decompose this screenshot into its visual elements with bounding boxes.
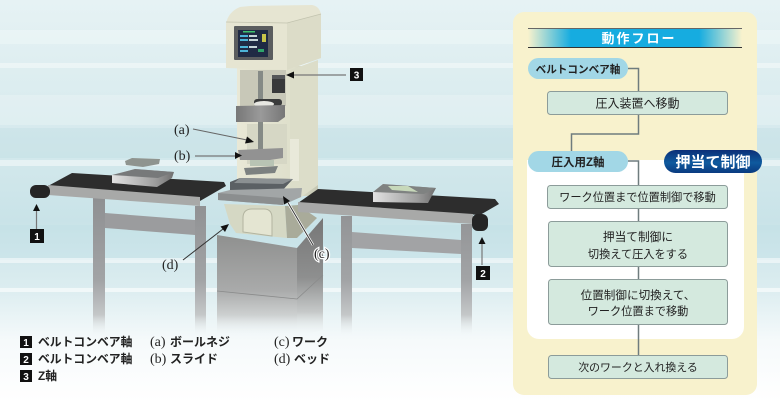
step: position control: ワーク位置まで位置制御で移動	[559, 190, 716, 204]
right frame	[298, 202, 473, 224]
step: replace work: 次のワークと入れ換える	[578, 361, 698, 374]
work upper	[244, 160, 278, 175]
badge: press control	[664, 150, 762, 173]
legend item 3: 3	[23, 372, 29, 383]
callout a	[174, 123, 254, 144]
mold	[230, 178, 293, 193]
step: return: 位置制御に切換えて、	[581, 288, 695, 302]
callout d: (d)	[162, 258, 179, 273]
legend item 1: ベルトコンベア軸	[38, 335, 133, 349]
left workpiece	[112, 158, 174, 187]
legend item a: (a)	[150, 335, 166, 350]
upper block	[236, 105, 285, 122]
callout 3	[286, 68, 363, 82]
step: press control: 押当て制御に	[603, 230, 673, 244]
left belt	[48, 173, 226, 201]
pill: press Z axis: 圧入用Z軸	[551, 155, 605, 169]
legend item b: (b)	[150, 352, 167, 367]
ball screw lower	[258, 122, 263, 150]
panel: flow	[513, 12, 762, 395]
panel: press control area	[527, 160, 744, 339]
callout c: (c)	[314, 247, 330, 262]
legend	[20, 335, 330, 383]
ball screw upper	[258, 71, 263, 103]
right belt	[298, 189, 499, 215]
callout 1: 1	[34, 232, 40, 243]
step: position control	[548, 186, 728, 208]
callout 3: 3	[354, 70, 360, 82]
legend item 3	[20, 369, 57, 383]
left frame	[48, 185, 200, 206]
base cabinet	[217, 218, 323, 336]
callout 1	[30, 204, 44, 243]
callout a: (a)	[174, 123, 190, 138]
callout c	[283, 196, 330, 262]
callout b	[174, 149, 242, 164]
step: press control: 切換えて圧入をする	[588, 248, 688, 261]
badge: press control: 押当て制御	[675, 153, 751, 171]
right roller	[472, 214, 488, 231]
column	[237, 60, 318, 198]
head housing	[226, 5, 321, 70]
machine: press unit	[217, 5, 323, 336]
connectors	[572, 68, 638, 355]
pill: belt conveyor axis	[528, 58, 628, 79]
step: replace work	[548, 356, 728, 378]
motor	[272, 75, 285, 93]
step: move to press	[548, 92, 728, 114]
left legs	[93, 198, 206, 335]
table	[218, 188, 302, 205]
pulley	[254, 99, 282, 107]
legend item d: ベッド	[294, 352, 330, 366]
callout d	[162, 224, 229, 273]
legend item b: スライド	[170, 352, 218, 366]
callout 2: 2	[480, 269, 486, 280]
left conveyor	[30, 158, 226, 335]
bed	[224, 204, 317, 238]
slide plate	[238, 148, 283, 160]
flow heading	[528, 28, 742, 48]
step: press control	[548, 222, 728, 266]
step: return: ワーク位置まで移動	[588, 304, 688, 318]
callout b: (b)	[174, 149, 191, 164]
legend item 2: ベルトコンベア軸	[38, 352, 133, 366]
right conveyor	[298, 184, 499, 335]
legend item d: (d)	[274, 352, 291, 367]
pill: belt conveyor axis: ベルトコンベア軸	[536, 63, 620, 76]
right workpiece	[373, 184, 436, 203]
legend item 2: 2	[23, 355, 29, 366]
step: return	[548, 280, 728, 324]
step: move to press: 圧入装置へ移動	[595, 96, 680, 110]
legend item a: ボールネジ	[170, 335, 230, 349]
legend item 3: Z軸	[38, 369, 57, 383]
right legs	[341, 216, 472, 335]
left roller	[30, 185, 50, 198]
touch screen	[234, 26, 273, 60]
pill: press Z axis	[528, 151, 628, 172]
legend item 1: 1	[23, 338, 29, 349]
flow heading: 動作フロー	[601, 31, 677, 46]
legend item c: ワーク	[292, 335, 328, 349]
legend item c: (c)	[274, 335, 290, 350]
callout 2	[476, 237, 490, 280]
